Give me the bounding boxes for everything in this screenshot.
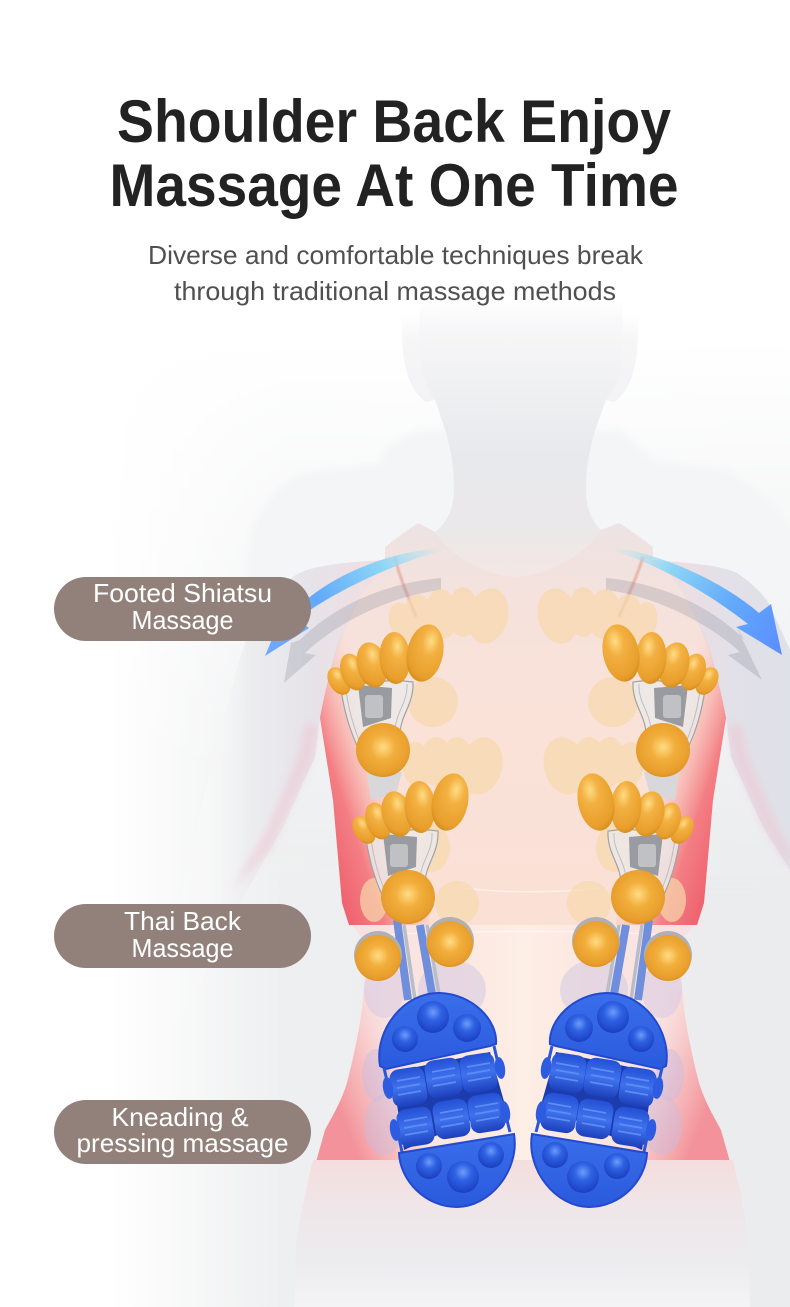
waist right red xyxy=(621,990,730,1162)
label: Kneading & pressing massage: Kneading & xyxy=(112,1102,248,1132)
blue arrow right xyxy=(616,548,782,655)
ghost rollers right xyxy=(532,584,686,925)
body silhouette xyxy=(140,300,790,1307)
left red band xyxy=(320,620,430,925)
title line 2: Massage At One Time xyxy=(110,152,678,219)
label: Footed Shiatsu Massage: Footed Shiatsu xyxy=(93,578,272,608)
ghost rollers left xyxy=(360,584,514,925)
label: Thai Back Massage xyxy=(54,904,311,968)
upper ball xyxy=(356,723,410,777)
rods xyxy=(397,920,433,1000)
massage arm left xyxy=(323,621,515,1207)
lower ball xyxy=(381,870,435,924)
hips xyxy=(294,1160,750,1307)
lavender ghost pads left xyxy=(362,960,486,1155)
strap lines xyxy=(395,557,643,617)
subtitle: Diverse and comfortable techniques break xyxy=(148,240,644,270)
left arm inner tint xyxy=(232,725,318,890)
label: Kneading & pressing massage: pressing massage xyxy=(76,1128,288,1158)
label: Kneading & pressing massage xyxy=(54,1100,311,1164)
faint rear silhouette xyxy=(240,430,790,900)
head and neck xyxy=(419,300,623,577)
lower five-node roller xyxy=(348,770,474,848)
blue arrow left xyxy=(265,548,441,656)
torso xyxy=(320,523,726,925)
subtitle line 2: through traditional massage methods xyxy=(174,276,616,306)
title: Shoulder Back Enjoy xyxy=(117,88,672,155)
lower bracket xyxy=(366,829,438,897)
massage arm right xyxy=(531,621,723,1207)
upper five-node roller xyxy=(323,621,449,699)
label: Footed Shiatsu Massage: Massage xyxy=(132,605,234,635)
label: Thai Back Massage: Massage xyxy=(132,933,234,963)
torso seam xyxy=(368,888,680,936)
middle strip xyxy=(367,772,402,800)
waist left red xyxy=(316,990,425,1162)
label: Footed Shiatsu Massage xyxy=(54,577,311,641)
small ball right xyxy=(426,917,474,967)
upper bracket xyxy=(341,680,413,748)
lavender ghost pads right xyxy=(560,960,684,1155)
shoulders and arms xyxy=(140,560,790,1060)
waist xyxy=(316,925,730,1162)
blue pad xyxy=(379,993,515,1207)
ears xyxy=(402,315,638,402)
gray arrow right xyxy=(606,578,762,680)
right red band xyxy=(616,620,726,925)
small ball left xyxy=(354,931,402,981)
right arm inner tint xyxy=(728,725,790,870)
label: Thai Back Massage: Thai Back xyxy=(124,906,242,936)
gray arrow left xyxy=(284,578,441,683)
